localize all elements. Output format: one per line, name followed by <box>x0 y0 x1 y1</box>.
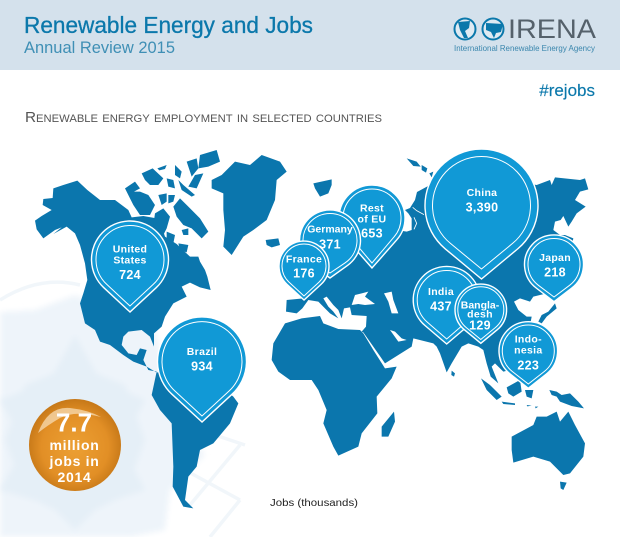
pin: Bangladesh: desh <box>467 309 493 321</box>
world map <box>28 150 588 508</box>
pin: Brazil: 934 <box>191 360 213 374</box>
IRENA logo <box>454 14 596 53</box>
pin: Brazil <box>158 317 246 422</box>
callout: 7.7 million jobs <box>29 399 121 491</box>
pin: Rest of EU: Rest <box>360 203 384 215</box>
header band <box>0 0 620 70</box>
pin: Japan: 218 <box>544 266 566 280</box>
map: Americas <box>28 150 287 508</box>
pin: Japan: Japan <box>539 252 571 264</box>
pin: China: 3,390 <box>466 201 498 215</box>
pin: Germany: Germany <box>307 224 353 236</box>
pin: France: 176 <box>293 267 315 281</box>
pin: United States: United <box>113 244 147 256</box>
IRENA logo: International Renewable Energy Agency <box>454 43 596 53</box>
callout: 7.7 million jobs: jobs in <box>48 453 100 469</box>
pin: Rest of EU: of EU <box>358 214 386 226</box>
title: Renewable Energy and Jobs <box>24 12 313 38</box>
highlight on coin <box>38 408 101 433</box>
icon: infinity globes <box>454 18 504 40</box>
section heading: Renewable energy employment in selected countries <box>25 109 382 126</box>
pin: Bangladesh: 129 <box>469 318 491 332</box>
map: Arctic archipelago <box>125 150 220 252</box>
pin: United States: 724 <box>119 268 141 282</box>
pin: India <box>413 266 480 344</box>
callout: 7.7 million jobs: 2014 <box>58 469 91 485</box>
pin: China: China <box>467 187 497 199</box>
pin: Indonesia <box>499 322 558 388</box>
hashtag: #rejobs <box>539 81 595 100</box>
subtitle: Annual Review 2015 <box>24 39 175 57</box>
pin: Germany <box>300 210 360 278</box>
IRENA logo: IRENA <box>508 14 596 44</box>
callout: 7.7 million jobs: million <box>49 437 100 453</box>
map: Greenland and Iceland <box>212 155 287 255</box>
pin: Rest of EU <box>339 185 405 268</box>
pin: Bangladesh: Bangla- <box>461 299 500 311</box>
pin: United States <box>92 221 168 312</box>
pin: Japan <box>524 235 584 302</box>
background pattern <box>0 282 245 537</box>
pin: France <box>279 241 329 300</box>
pin: Indonesia: nesia <box>514 344 542 356</box>
pin: France: France <box>286 253 322 265</box>
pin: Bangladesh <box>455 284 507 343</box>
pin: Brazil: Brazil <box>187 346 217 358</box>
pin: India: India <box>428 286 454 298</box>
pin: United States: States <box>113 254 147 266</box>
pin: India: 437 <box>430 300 452 314</box>
callout: 7.7 million jobs: 7.7 <box>56 408 92 438</box>
pin: China <box>425 149 538 279</box>
pin: Indonesia: 223 <box>517 358 539 372</box>
axis note: Jobs (thousands) <box>270 497 358 509</box>
map: Eurasia, Africa and Oceania <box>272 158 588 490</box>
pin: Indonesia: Indo- <box>515 334 542 346</box>
pin: Germany: 371 <box>319 238 341 252</box>
pin: Rest of EU: 653 <box>361 227 383 241</box>
